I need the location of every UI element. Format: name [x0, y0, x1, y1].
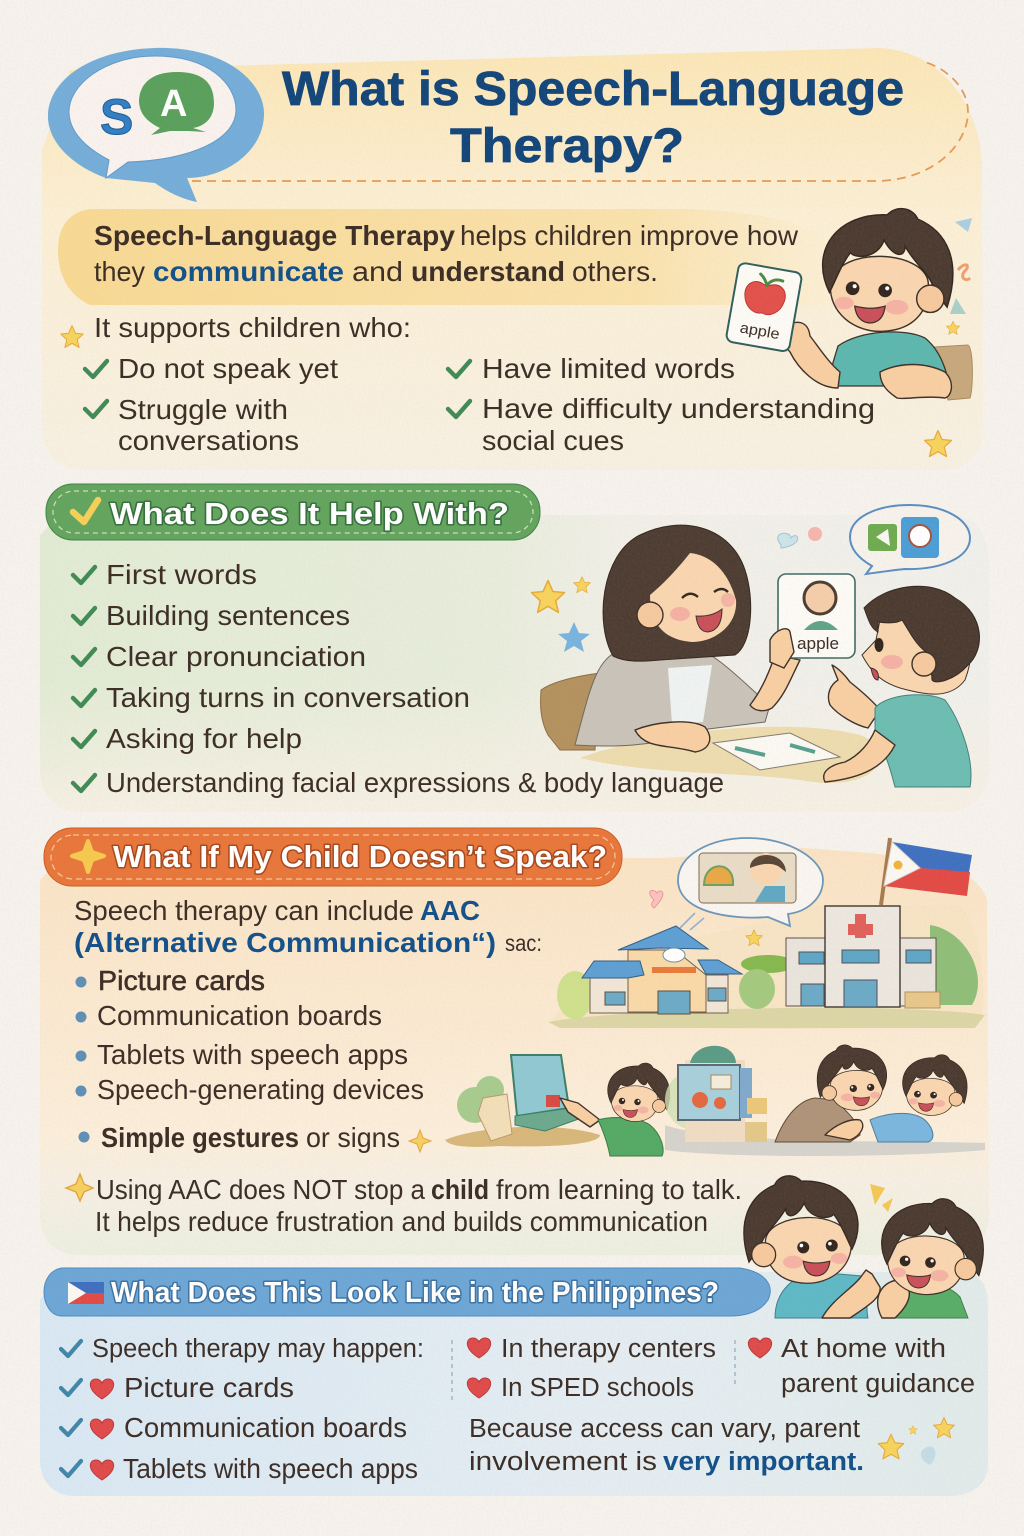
help list — [73, 559, 724, 798]
AAC reassurance note: It helps reduce frustration and builds communication — [95, 1206, 708, 1237]
help list: Clear pronunciation — [106, 641, 366, 672]
decorative stars — [878, 1418, 954, 1465]
AAC intro text: sac: — [505, 930, 542, 956]
therapy locations list left — [61, 1335, 424, 1484]
speech bubble with cards — [850, 505, 970, 574]
speech bubble with picture card — [678, 838, 823, 930]
icon: speech bubble with S and A: S — [100, 89, 133, 145]
therapy locations list right: At home with — [781, 1335, 946, 1363]
therapy locations list right: parent guidance — [781, 1370, 975, 1398]
icon: speech bubble with S and A — [48, 48, 264, 202]
definition text: others. — [572, 256, 658, 287]
AAC bullet list: Communication boards — [97, 1000, 382, 1031]
parent involvement note: Because access can vary, parent — [469, 1415, 860, 1443]
AAC reassurance note: child — [431, 1174, 489, 1205]
title: What is Speech-Language — [282, 63, 904, 116]
supported children list: Do not speak yet — [118, 353, 338, 384]
icon: star — [61, 326, 83, 348]
AAC bullet list: Picture cards — [98, 965, 265, 996]
definition text: understand — [411, 256, 565, 287]
icon: small Philippine flag — [68, 1282, 104, 1304]
parent involvement note: very important. — [663, 1448, 864, 1476]
AAC bullet list: or signs — [306, 1122, 400, 1153]
clinic building — [786, 906, 940, 1008]
illustration: boy holding apple card — [726, 209, 972, 400]
therapy locations list left: Communication boards — [124, 1412, 407, 1443]
definition text: and — [352, 256, 403, 287]
Philippine flag — [881, 838, 972, 905]
icon: speech bubble with S and A: A — [160, 83, 187, 125]
panel: what does it help with — [40, 484, 989, 812]
dashed title outline — [192, 62, 968, 181]
therapy locations list left: Picture cards — [124, 1372, 294, 1403]
supported children list: Have limited words — [482, 353, 735, 384]
supported children list: Struggle with — [118, 394, 288, 425]
title: Therapy? — [450, 120, 684, 173]
therapy locations list right: In SPED schools — [501, 1374, 694, 1402]
AAC bullet list: Simple gestures — [101, 1122, 299, 1153]
definition text — [94, 220, 798, 287]
header pill: What Does It Help With? — [110, 496, 509, 531]
help list: Understanding facial expressions & body language — [106, 767, 724, 798]
definition text: helps children improve how — [460, 220, 798, 251]
help list: First words — [106, 559, 257, 590]
AAC intro text: AAC — [420, 895, 480, 926]
decorative stickers — [924, 218, 972, 457]
header pill: What If My Child Doesn’t Speak? — [113, 839, 607, 874]
AAC reassurance note: Using AAC does NOT stop a — [96, 1174, 426, 1205]
illustration: picture board and two children — [665, 1045, 985, 1156]
definition text: communicate — [153, 256, 344, 287]
therapy locations list right: In therapy centers — [501, 1335, 716, 1363]
panel: what if my child doesn't speak — [40, 828, 989, 1255]
AAC intro text — [74, 895, 542, 958]
divider lines — [452, 1340, 735, 1400]
supported children list: It supports children who: — [94, 312, 411, 343]
panel: philippines — [40, 1176, 988, 1496]
help list: Taking turns in conversation — [106, 682, 470, 713]
AAC intro text: Speech therapy can include — [74, 895, 414, 926]
therapy locations list left: Speech therapy may happen: — [92, 1335, 424, 1363]
supported children list: social cues — [482, 425, 624, 456]
definition banner — [58, 209, 830, 305]
header banner — [44, 1268, 770, 1316]
parent involvement note: involvement is — [469, 1448, 657, 1476]
help list: Asking for help — [106, 723, 302, 754]
illustration: two children talking — [744, 1176, 983, 1318]
header pill — [46, 484, 540, 540]
school building — [582, 926, 742, 1014]
supported children list: conversations — [118, 425, 299, 456]
therapy locations list right — [467, 1335, 975, 1402]
AAC reassurance note — [66, 1174, 742, 1237]
therapy locations list left: Tablets with speech apps — [123, 1453, 418, 1484]
panel: introduction — [42, 48, 983, 470]
supported children list — [85, 312, 875, 456]
AAC bullet list — [76, 965, 431, 1153]
illustration: child with tablet — [445, 1055, 670, 1156]
definition text: they — [94, 256, 145, 287]
illustration: school and clinic with Philippine flag — [548, 838, 985, 1029]
parent involvement note — [469, 1415, 864, 1476]
header pill — [44, 828, 622, 886]
supported children list: Have difficulty understanding — [482, 393, 875, 424]
AAC bullet list: Speech-generating devices — [97, 1074, 424, 1105]
AAC reassurance note: from learning to talk. — [496, 1174, 742, 1205]
illustration: therapist and child with picture card: apple — [797, 634, 839, 653]
AAC bullet list: Tablets with speech apps — [97, 1039, 408, 1070]
AAC intro text: (Alternative Communication“) — [74, 927, 496, 958]
help list: Building sentences — [106, 600, 350, 631]
header banner: What Does This Look Like in the Philippines? — [111, 1277, 719, 1309]
title — [282, 63, 904, 173]
illustration: boy holding apple card: apple — [739, 319, 781, 343]
definition text: Speech-Language Therapy — [94, 220, 456, 251]
illustration: therapist and child with picture card — [532, 505, 979, 787]
